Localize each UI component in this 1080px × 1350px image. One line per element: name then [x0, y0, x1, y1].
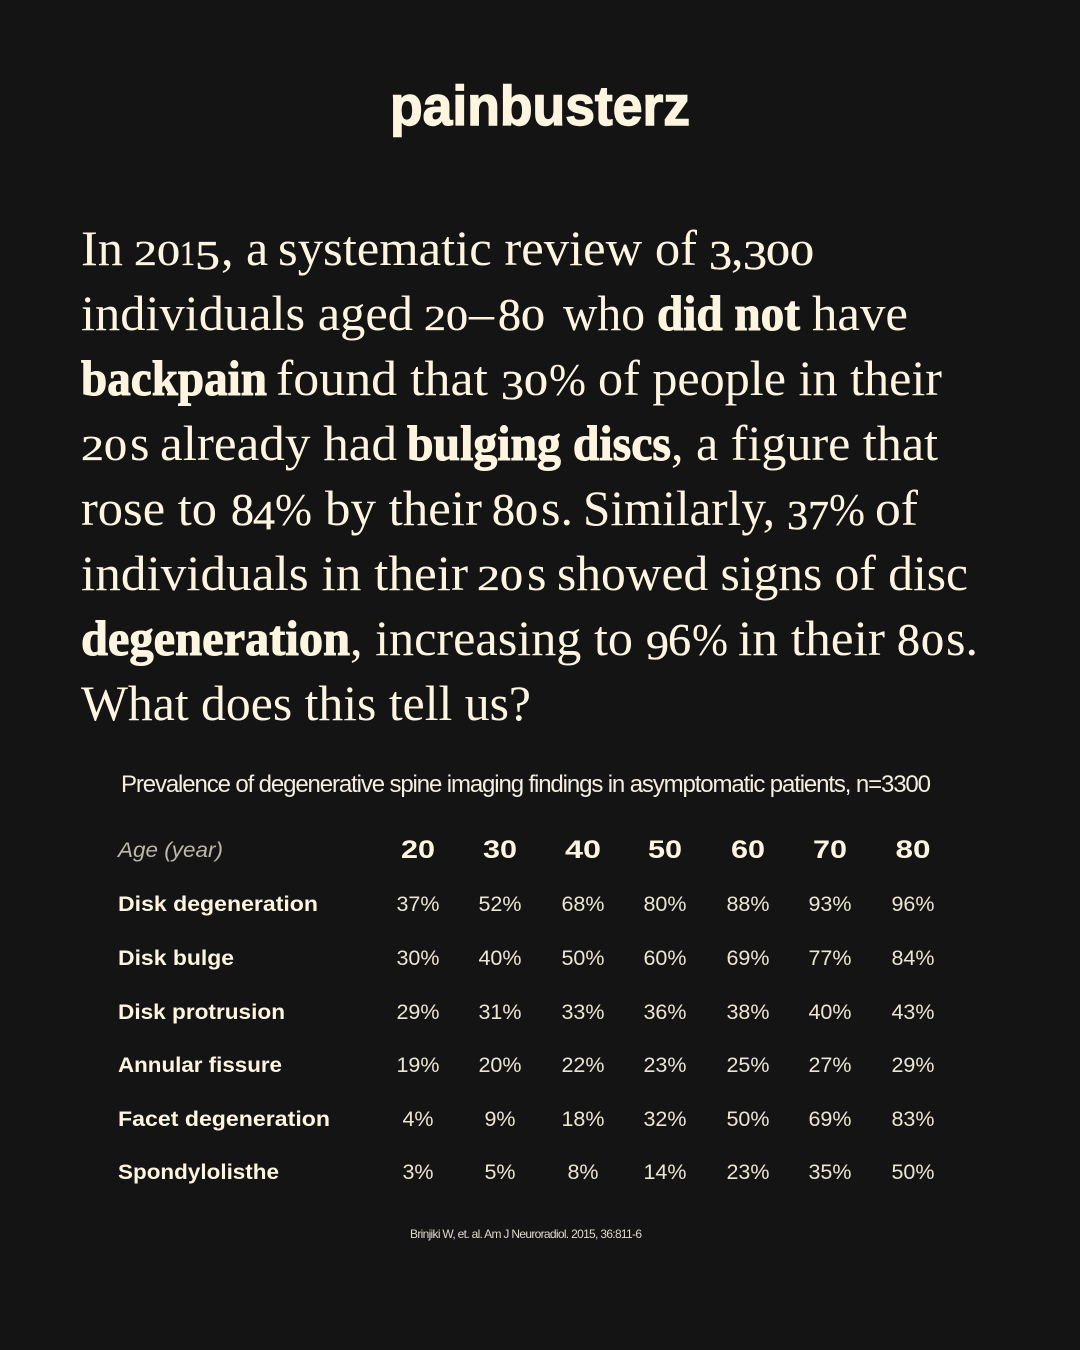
- text block: main paragraph: by their: [325, 480, 482, 536]
- text block: main paragraph: %: [275, 484, 312, 535]
- text block: main paragraph: %: [692, 614, 728, 665]
- row: disk bulge: 84%: [891, 946, 935, 970]
- row: spondylolisthe: 23%: [726, 1160, 770, 1184]
- text block: main paragraph: 20: [424, 299, 468, 338]
- row: disk bulge: 50%: [561, 946, 605, 970]
- row: disk degeneration: 88%: [726, 892, 770, 916]
- text block: main paragraph: 00: [766, 234, 814, 273]
- text block: main paragraph: In: [81, 220, 123, 276]
- text block: main paragraph: 5: [195, 232, 220, 278]
- row: annular fissure: 19%: [396, 1053, 440, 1077]
- header row: age columns: [116, 836, 931, 864]
- text block: main paragraph: a: [246, 220, 268, 276]
- header row: age columns: 30: [483, 836, 517, 864]
- row: disk degeneration: [118, 892, 935, 916]
- row: annular fissure: Annular fissure: [118, 1054, 282, 1077]
- text block: main paragraph: 8: [897, 614, 920, 665]
- row: disk bulge: 30%: [396, 946, 440, 970]
- text block: main paragraph: found that: [276, 350, 488, 406]
- row: disk protrusion: Disk protrusion: [118, 1001, 285, 1024]
- text block: main paragraph: showed signs of disc: [557, 545, 968, 601]
- panel: prevalence table: [116, 836, 935, 1184]
- row: disk protrusion: [118, 1000, 935, 1024]
- row: disk bulge: 40%: [478, 946, 522, 970]
- text block: main paragraph: 8: [231, 484, 254, 535]
- text block: main paragraph: %: [829, 484, 865, 535]
- row: disk protrusion: 43%: [891, 1000, 935, 1024]
- text block: main paragraph: already had: [160, 415, 397, 471]
- row: facet degeneration: 4%: [402, 1107, 434, 1131]
- text block: main paragraph: What does this tell us?: [81, 675, 531, 731]
- text block: main paragraph: have: [812, 285, 908, 341]
- row: spondylolisthe: 35%: [808, 1160, 852, 1184]
- row: disk bulge: [118, 946, 935, 970]
- text block: main paragraph: bulging discs: [407, 415, 671, 471]
- heading: table title: Prevalence of degenerative spine imaging findings in asymptomatic patients, n=3300: [121, 771, 931, 798]
- row: disk protrusion: 40%: [808, 1000, 852, 1024]
- row: annular fissure: 20%: [478, 1053, 522, 1077]
- row: disk protrusion: 29%: [396, 1000, 440, 1024]
- row: facet degeneration: [118, 1107, 935, 1131]
- text block: main paragraph: 9: [646, 622, 669, 668]
- text block: main paragraph: 8: [492, 484, 515, 535]
- row: spondylolisthe: 14%: [643, 1160, 687, 1184]
- text block: main paragraph: 0: [521, 299, 545, 338]
- text block: main paragraph: [81, 220, 978, 731]
- row: facet degeneration: 9%: [484, 1107, 516, 1131]
- text block: main paragraph: in their: [738, 610, 885, 666]
- text block: main paragraph: 0: [515, 494, 538, 533]
- header row: age columns: 60: [731, 836, 765, 864]
- title: painbusterz logo: painbusterz: [390, 74, 690, 137]
- row: spondylolisthe: 5%: [484, 1160, 516, 1184]
- row: disk degeneration: 93%: [808, 892, 852, 916]
- row: disk protrusion: 31%: [478, 1000, 522, 1024]
- header row: age columns: 40: [565, 836, 601, 864]
- text block: main paragraph: degeneration: [81, 610, 350, 666]
- row: disk protrusion: 33%: [561, 1000, 605, 1024]
- row: facet degeneration: 69%: [808, 1107, 852, 1131]
- row: disk degeneration: Disk degeneration: [118, 893, 318, 916]
- text block: main paragraph: 6: [668, 614, 691, 665]
- row: facet degeneration: Facet degeneration: [118, 1108, 330, 1131]
- row: spondylolisthe: 8%: [567, 1160, 599, 1184]
- text block: main paragraph: of people in their: [598, 350, 942, 406]
- row: facet degeneration: 18%: [561, 1107, 605, 1131]
- row: disk bulge: Disk bulge: [118, 947, 234, 970]
- row: disk degeneration: 80%: [643, 892, 687, 916]
- citation footnote: Brinjiki W, et. al. Am J Neuroradiol. 2015, 36:811-6: [410, 1227, 642, 1241]
- text block: main paragraph: s.: [946, 610, 978, 666]
- row: disk degeneration: 37%: [396, 892, 440, 916]
- text block: main paragraph: ,: [221, 220, 234, 276]
- header row: age columns: 80: [896, 836, 930, 864]
- row: annular fissure: 23%: [643, 1053, 687, 1077]
- text block: main paragraph: who: [563, 285, 645, 341]
- header row: age columns: Age (year): [116, 839, 223, 862]
- header row: age columns: 20: [401, 836, 435, 864]
- row: annular fissure: 27%: [808, 1053, 852, 1077]
- text block: main paragraph: 3: [501, 362, 524, 408]
- row: disk bulge: 77%: [808, 946, 852, 970]
- row: annular fissure: 25%: [726, 1053, 770, 1077]
- text block: main paragraph: 0: [524, 364, 548, 403]
- row: annular fissure: [118, 1053, 935, 1077]
- row: annular fissure: 22%: [561, 1053, 605, 1077]
- row: spondylolisthe: Spondylolisthe: [118, 1161, 279, 1184]
- row: facet degeneration: 83%: [891, 1107, 935, 1131]
- text block: main paragraph: %: [549, 354, 586, 405]
- text block: main paragraph: 0: [921, 624, 944, 663]
- text block: main paragraph: Similarly,: [583, 480, 775, 536]
- row: facet degeneration: 50%: [726, 1107, 770, 1131]
- text block: main paragraph: systematic review of: [278, 220, 697, 276]
- text block: main paragraph: backpain: [81, 350, 267, 406]
- row: disk protrusion: 38%: [726, 1000, 770, 1024]
- row: disk degeneration: 96%: [891, 892, 935, 916]
- text block: main paragraph: 1: [180, 234, 195, 273]
- text block: main paragraph: ,: [731, 220, 744, 276]
- row: facet degeneration: 32%: [643, 1107, 687, 1131]
- text block: main paragraph: rose to: [81, 480, 217, 536]
- row: spondylolisthe: 3%: [402, 1160, 434, 1184]
- text block: main paragraph: –: [468, 285, 495, 341]
- text block: main paragraph: 8: [498, 289, 521, 340]
- row: disk degeneration: 52%: [478, 892, 522, 916]
- text block: main paragraph: , a figure that: [671, 415, 938, 471]
- text block: main paragraph: 37: [787, 492, 829, 538]
- text block: main paragraph: 3: [709, 232, 732, 278]
- text block: main paragraph: s: [130, 415, 149, 471]
- text block: main paragraph: 3: [743, 232, 767, 278]
- text block: main paragraph: 4: [253, 492, 275, 538]
- text block: main paragraph: did not: [657, 285, 800, 341]
- text block: main paragraph: , increasing to: [350, 610, 633, 666]
- row: spondylolisthe: [118, 1160, 935, 1184]
- row: disk bulge: 60%: [643, 946, 687, 970]
- text block: main paragraph: s.: [541, 480, 573, 536]
- text block: main paragraph: individuals aged: [81, 285, 413, 341]
- text block: main paragraph: 20: [477, 559, 523, 598]
- header row: age columns: 70: [813, 836, 847, 864]
- text block: main paragraph: of: [875, 480, 918, 536]
- row: disk protrusion: 36%: [643, 1000, 687, 1024]
- text block: main paragraph: s: [527, 545, 546, 601]
- text block: main paragraph: individuals in their: [81, 545, 468, 601]
- text block: main paragraph: 20: [81, 429, 127, 468]
- row: annular fissure: 29%: [891, 1053, 935, 1077]
- row: disk degeneration: 68%: [561, 892, 605, 916]
- text block: main paragraph: 20: [134, 234, 180, 273]
- row: spondylolisthe: 50%: [891, 1160, 935, 1184]
- row: disk bulge: 69%: [726, 946, 770, 970]
- header row: age columns: 50: [648, 836, 682, 864]
